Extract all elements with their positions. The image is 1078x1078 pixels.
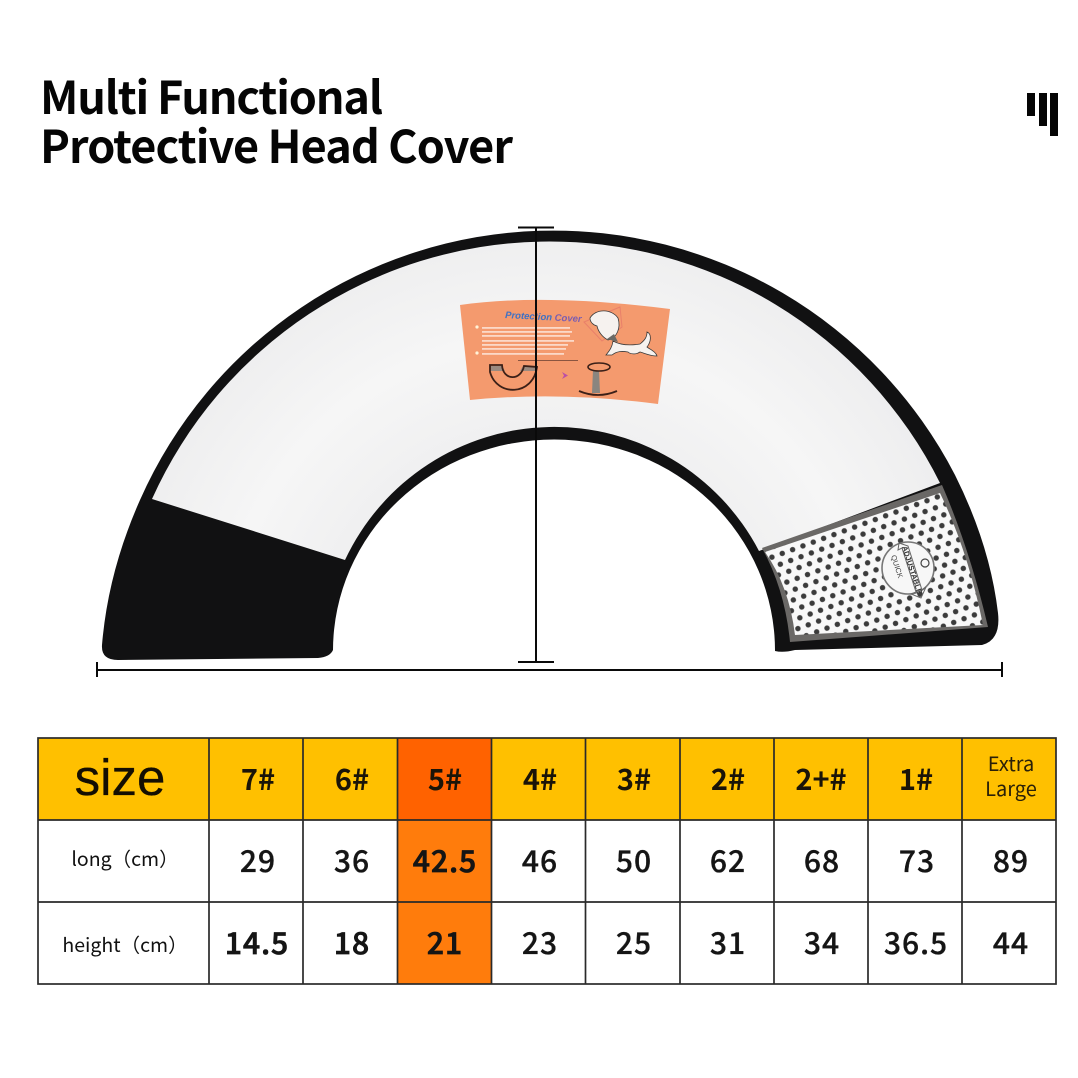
height row: height（cm） — [62, 929, 188, 958]
label instructions — [475, 325, 578, 361]
long row: 29 — [240, 837, 276, 881]
product: protective cone cover — [102, 231, 998, 660]
icon: brand bars — [1027, 93, 1058, 136]
long row: 89 — [993, 837, 1029, 881]
highlighted size column — [398, 738, 492, 984]
long row: 36 — [334, 837, 370, 881]
width measurement line — [97, 662, 1002, 677]
height row: 34 — [804, 919, 840, 963]
badge: adjustable logo — [882, 542, 934, 598]
long row: 46 — [522, 837, 558, 881]
label illustration: dog — [584, 307, 657, 356]
clear window — [152, 241, 940, 560]
header labels: Extra — [988, 748, 1034, 777]
title: Protective Head Cover — [40, 111, 513, 176]
height row: 44 — [993, 919, 1029, 963]
header labels: 3# — [617, 757, 651, 799]
long row — [71, 837, 1029, 881]
badge: adjustable logo: ADJUSTABLE — [900, 545, 924, 595]
header row background — [38, 738, 1056, 820]
header labels: 6# — [335, 757, 369, 799]
label arrow — [562, 372, 568, 379]
title — [40, 62, 513, 176]
long row: 68 — [804, 837, 840, 881]
header labels: 2+# — [795, 757, 847, 799]
header labels: 7# — [241, 757, 275, 799]
long row: 42.5 — [413, 837, 477, 881]
height row — [62, 919, 1029, 963]
table grid — [38, 738, 1056, 984]
size table — [38, 738, 1056, 984]
header labels: 2# — [711, 757, 745, 799]
title: Multi Functional — [40, 62, 383, 127]
height row: 14.5 — [225, 919, 289, 963]
cover silhouette and black fabric patch — [102, 231, 998, 660]
badge: adjustable logo: QUICK — [889, 554, 905, 579]
label heading: Protection Cover — [505, 310, 583, 325]
height row: 21 — [427, 919, 463, 963]
mesh patch frame — [762, 485, 988, 642]
long row: long（cm） — [71, 843, 179, 872]
height measurement line — [518, 227, 554, 662]
header labels: 4# — [523, 757, 557, 799]
long row: 73 — [899, 837, 935, 881]
label diagram: cone flat — [490, 365, 537, 390]
height row: 31 — [710, 919, 746, 963]
height row: 18 — [334, 919, 370, 963]
label diagram: cone worn — [579, 363, 617, 395]
height row: 25 — [616, 919, 652, 963]
orange instruction label — [460, 300, 670, 404]
dotted mesh patch — [765, 493, 983, 635]
header labels: 5# — [428, 757, 462, 799]
header labels — [75, 748, 1037, 806]
long row: 62 — [710, 837, 746, 881]
header labels: Large — [985, 773, 1037, 802]
header labels: size — [75, 749, 165, 806]
height row: 23 — [522, 919, 558, 963]
height row: 36.5 — [884, 919, 948, 963]
long row: 50 — [616, 837, 652, 881]
header labels: 1# — [899, 757, 933, 799]
